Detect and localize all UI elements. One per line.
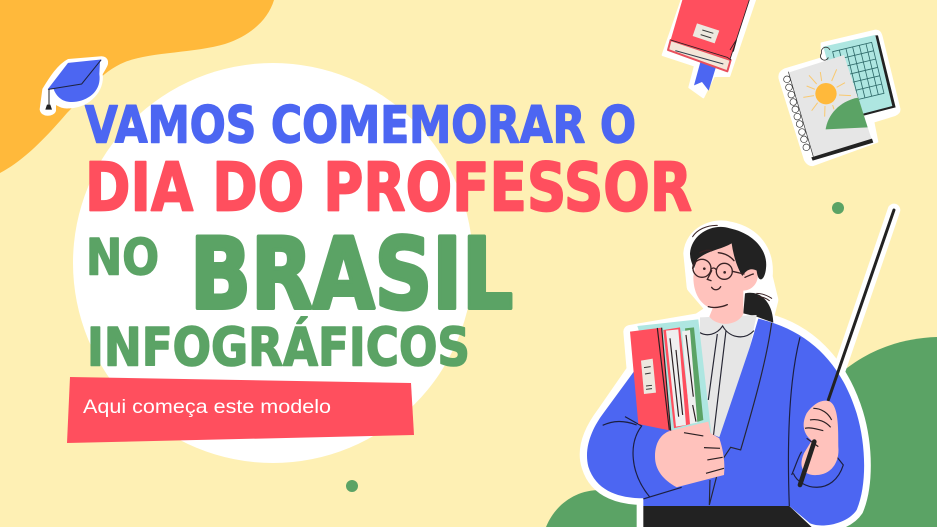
subtitle banner <box>67 377 414 443</box>
subtitle text: Aqui começa este modelo <box>83 396 331 418</box>
icon: red book with bookmark <box>663 0 755 97</box>
title line 2: DIA DO PROFESSOR <box>85 148 692 226</box>
title line 1: VAMOS COMEMORAR O <box>85 96 636 156</box>
pointer stick <box>828 210 894 400</box>
book stack <box>630 319 712 437</box>
spiral binding <box>784 72 813 157</box>
jacket <box>587 319 864 525</box>
collar <box>700 323 772 505</box>
green blob bottom right <box>770 337 937 527</box>
grid on teal notebook <box>833 42 884 103</box>
orange corner blob <box>0 0 274 173</box>
green dot upper <box>832 202 844 214</box>
left hand holding books <box>655 422 724 487</box>
icon: notebooks with sun drawing <box>779 31 899 165</box>
teacher illustration <box>586 210 894 527</box>
title word: brasil: BRASIL <box>190 218 513 332</box>
blouse <box>699 315 757 440</box>
icon: graduation cap <box>41 57 107 115</box>
right hand holding pointer <box>801 401 838 475</box>
skirt <box>643 506 812 527</box>
green dot lower <box>346 480 358 492</box>
glasses and face details <box>693 225 772 307</box>
green blob bottom left <box>546 490 660 527</box>
neck and face <box>693 243 758 324</box>
sticker outline <box>586 210 894 527</box>
hair <box>690 227 766 279</box>
white circle <box>73 63 473 463</box>
title word: no: NO <box>86 228 159 286</box>
jacket lines <box>603 337 843 506</box>
title line 4: INFOGRÁFICOS <box>87 316 470 378</box>
ponytail <box>743 293 773 323</box>
